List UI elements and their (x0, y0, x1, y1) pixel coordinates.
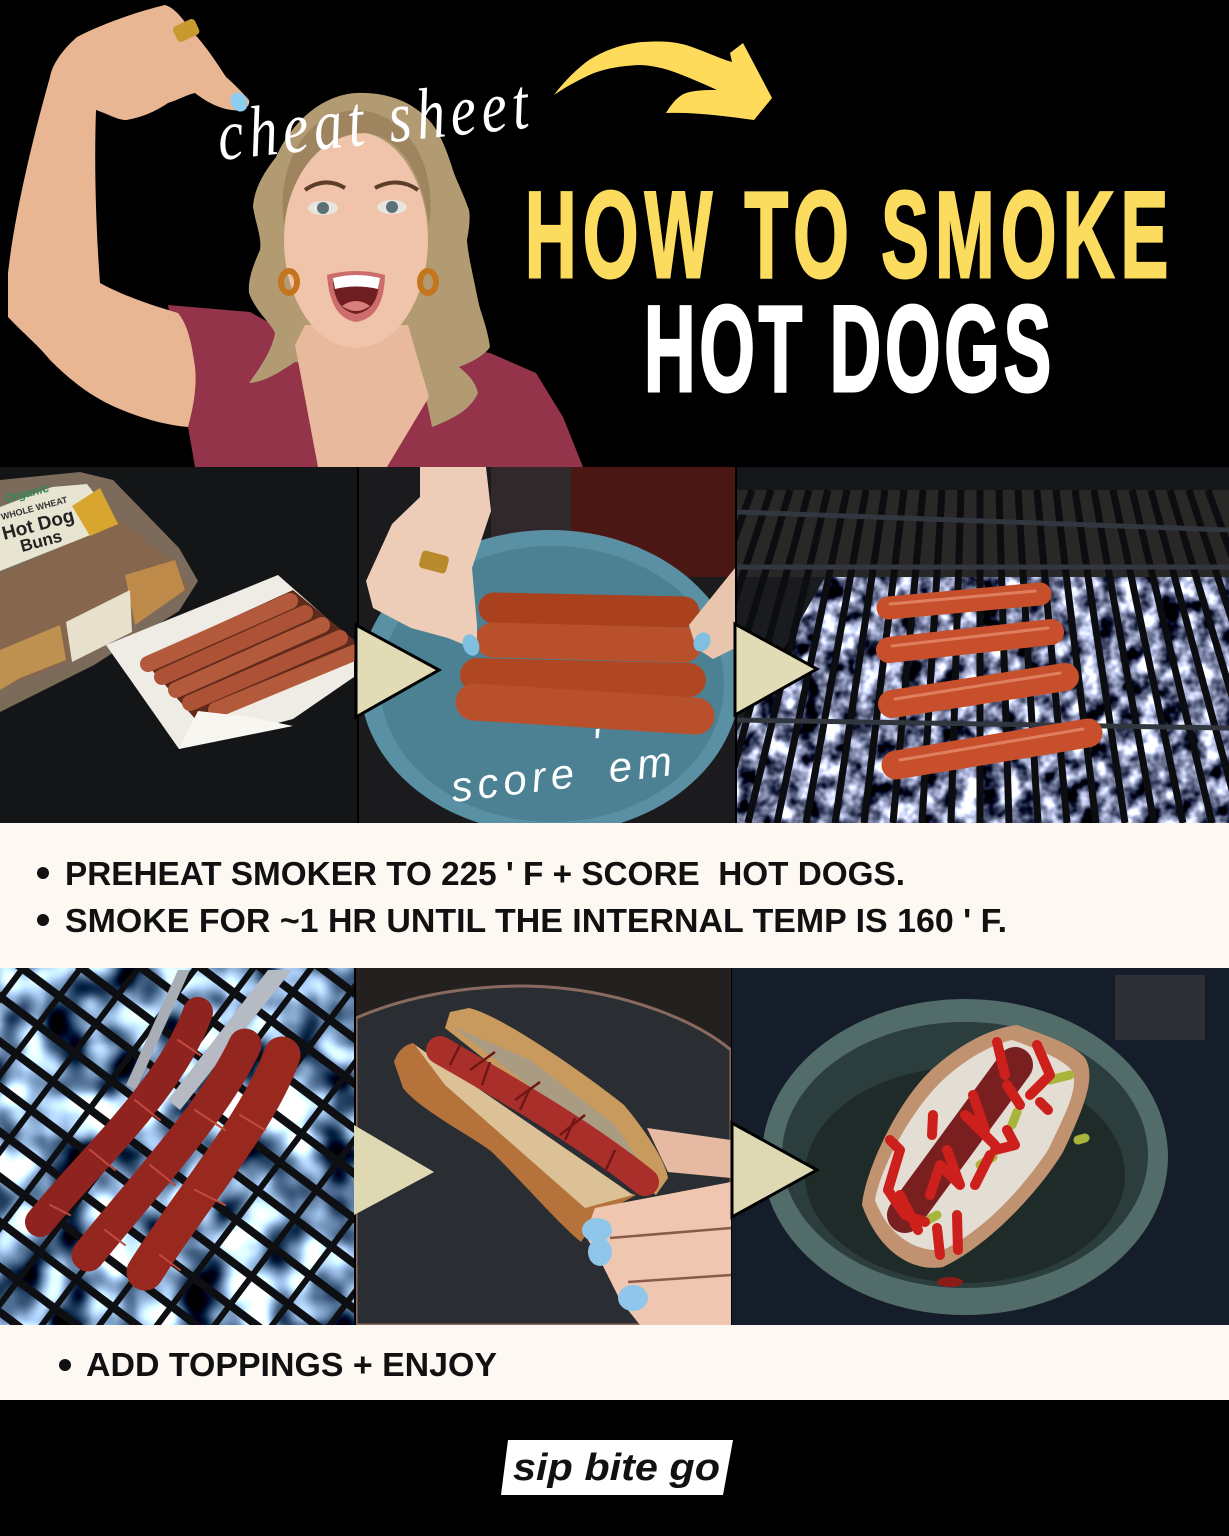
grill (0, 968, 354, 1325)
instructions panel: smoking steps: PREHEAT SMOKER TO 225 ' F + SCORE HOT DOGS. (65, 855, 905, 892)
bun bag (0, 472, 198, 712)
nails (582, 1218, 612, 1242)
cross bars (737, 512, 1229, 728)
bun label: WHOLE WHEAT (0, 494, 69, 522)
photo: scoring hot dogs on a blue plate (359, 467, 740, 834)
arrow: pointing to title (554, 41, 772, 120)
ring (172, 18, 201, 43)
paper fold (179, 711, 293, 749)
photo: woman pointing at heading (8, 5, 583, 467)
arrow: step 4 to 5 (354, 1125, 434, 1215)
nail (462, 634, 480, 656)
hot dog (440, 1050, 645, 1182)
face (284, 132, 428, 348)
lower fingers (585, 1182, 731, 1325)
instructions panel: smoking steps (0, 823, 1229, 968)
photo: hot dog in bun held over plate (356, 968, 731, 1325)
upper hand (647, 1128, 731, 1178)
smoked hot dogs (40, 1012, 282, 1272)
hair (249, 93, 490, 427)
eyebrows (305, 182, 418, 190)
hot dogs in package (142, 590, 356, 722)
blue plate (360, 530, 740, 834)
photo: finished hot dog with toppings in bowl (732, 968, 1229, 1325)
arrow: step 5 to 6 (732, 1123, 817, 1217)
score em label: ' (589, 720, 605, 767)
grill bars (737, 489, 1229, 823)
plate (356, 986, 731, 1325)
hair fringe (283, 110, 431, 225)
open mouth (327, 271, 385, 322)
photo: smoked hot dogs on grill with tongs (0, 968, 354, 1325)
buns (0, 520, 190, 690)
instructions panel: smoking steps: SMOKE FOR ~1 HR UNTIL THE INTERNAL TEMP IS 160 ' F. (65, 902, 1007, 939)
bun label: Hot Dog (0, 505, 77, 545)
fingernail (227, 89, 251, 115)
logo: sip bite go: sip bite go (513, 1447, 720, 1489)
score marks (450, 1045, 615, 1172)
title: HOT DOGS (644, 281, 1051, 418)
arrow: step 1 to 2 (356, 625, 439, 717)
instructions panel: toppings (0, 1325, 1229, 1400)
score marks (50, 1040, 265, 1270)
bowl (762, 999, 1168, 1315)
score em label: em (606, 737, 674, 792)
relish (925, 1075, 1085, 1222)
bun label: Organic (3, 481, 51, 506)
left hand (366, 467, 491, 650)
eyes (308, 201, 338, 215)
photo: packaged hot dogs and buns (0, 467, 357, 823)
paper (106, 575, 354, 749)
dark corner above foil (735, 577, 825, 735)
bun label (0, 481, 118, 571)
title (525, 167, 1168, 418)
neck and chest (295, 325, 429, 467)
bun (862, 1025, 1089, 1268)
hot dogs (888, 591, 1088, 765)
arm and pointing hand (8, 5, 249, 427)
spilled ketchup (937, 1277, 963, 1287)
logo: sip bite go (501, 1440, 733, 1495)
foil (735, 577, 1229, 823)
bun label: Buns (18, 527, 64, 556)
tongs (126, 970, 190, 1090)
sausage (905, 1065, 1015, 1215)
ketchup (888, 1042, 1050, 1255)
hot dogs (474, 608, 696, 716)
lower bag label (66, 590, 132, 662)
instructions panel: toppings: ADD TOPPINGS + ENJOY (86, 1346, 497, 1383)
arrow: step 2 to 3 (735, 624, 817, 715)
foil (0, 968, 354, 1325)
lower bun slice (394, 1043, 636, 1242)
right hand (689, 568, 735, 659)
photo: hot dogs on smoker grill (737, 467, 1229, 823)
upper bun slice (445, 1008, 668, 1195)
score em label: score (448, 749, 577, 811)
background blur (1115, 975, 1205, 1040)
shirt (168, 305, 583, 467)
earrings (281, 271, 297, 293)
cheat sheet script label: cheat sheet (213, 64, 534, 176)
gold ring (419, 550, 449, 574)
nail (693, 632, 710, 652)
title: HOW TO SMOKE (525, 167, 1168, 304)
